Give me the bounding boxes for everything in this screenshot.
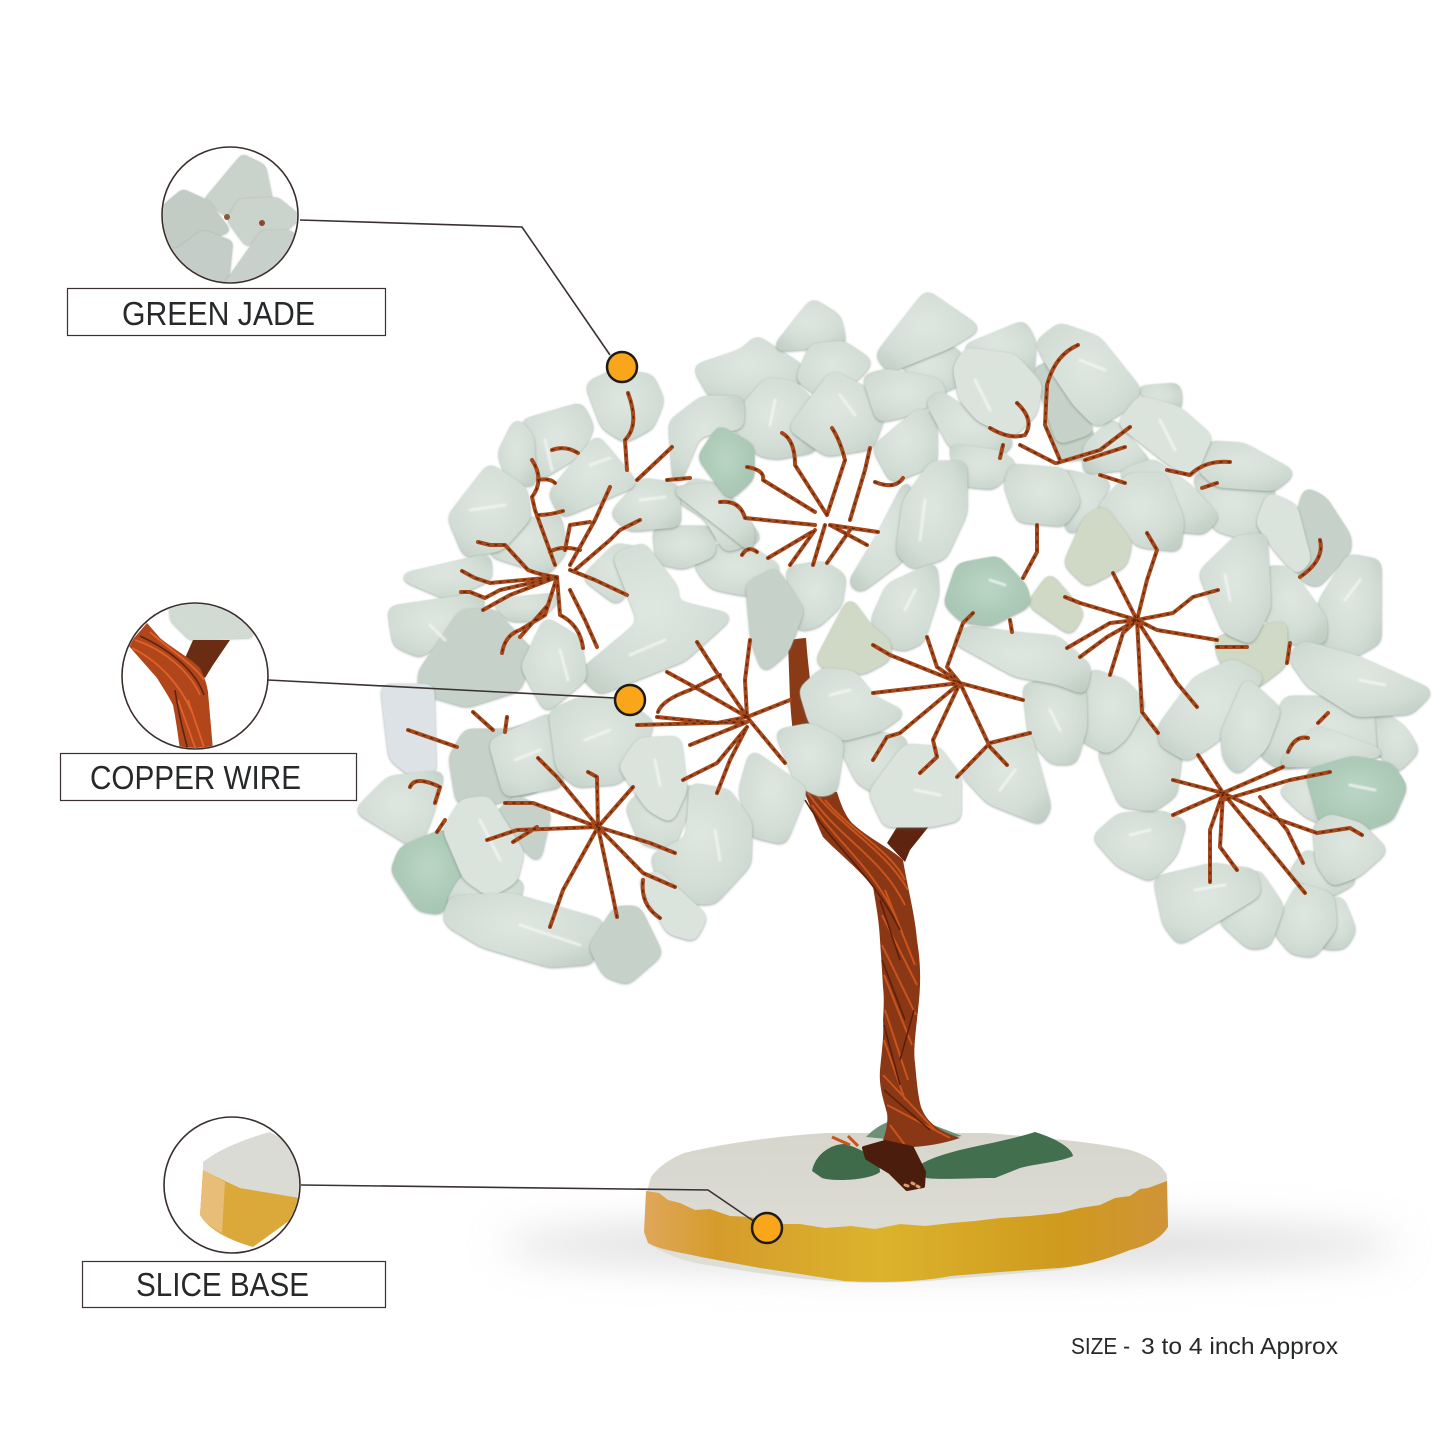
size note: 3 to 4 inch Approx	[1141, 1333, 1339, 1359]
leader line	[300, 220, 610, 355]
callout: copper wire	[60, 595, 645, 800]
label: COPPER WIRE	[90, 759, 301, 796]
base shadow	[500, 1221, 1400, 1269]
label: GREEN JADE	[122, 295, 315, 332]
leader line	[268, 680, 615, 698]
tree trunk of twisted copper	[788, 638, 960, 1189]
marker	[607, 352, 637, 382]
inset photo: jade stones	[160, 147, 300, 290]
marker	[615, 685, 645, 715]
marker	[752, 1213, 782, 1243]
label box	[68, 288, 386, 336]
root knot	[864, 1142, 924, 1189]
inset photo: gilded edge	[164, 1117, 302, 1253]
callout: green jade	[68, 147, 637, 382]
inset photo: twisted copper	[122, 595, 268, 750]
slice base	[644, 1118, 1168, 1283]
label box	[82, 1262, 386, 1308]
label box	[60, 754, 356, 800]
green stones on base	[812, 1118, 1073, 1180]
leader line	[301, 1185, 755, 1222]
stones: crown of green jade chips	[360, 295, 1428, 980]
back stones	[1047, 407, 1093, 457]
twisted copper wire branches	[408, 345, 1362, 927]
wire strands	[808, 793, 950, 1145]
label: SLICE BASE	[136, 1266, 309, 1303]
size note: SIZE -	[1071, 1333, 1130, 1359]
stone highlights	[430, 360, 1385, 945]
callout: slice base	[82, 1117, 782, 1308]
